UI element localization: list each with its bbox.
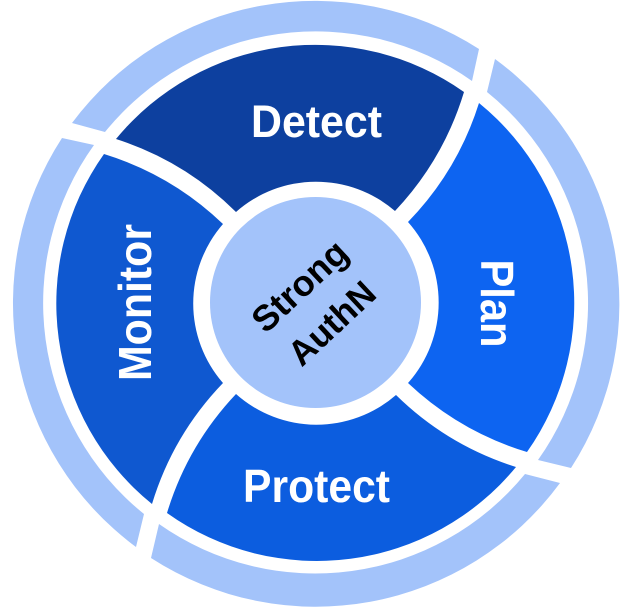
- label: Plan: Plan: [471, 260, 523, 348]
- hub label line: Strong: Strong: [243, 231, 356, 340]
- outer ring: right arc: [487, 59, 619, 468]
- segment: Monitor: [56, 154, 223, 504]
- outer ring: bottom arc: [151, 474, 560, 607]
- hub label line: AuthN: AuthN: [280, 274, 384, 374]
- segment: Detect: [116, 45, 464, 212]
- outer ring: top arc: [72, 1, 479, 132]
- segment: Plan: [408, 103, 574, 452]
- outer ring: left arc: [13, 138, 144, 547]
- label: Protect: Protect: [243, 460, 390, 512]
- label: Detect: Detect: [251, 96, 382, 147]
- label: Monitor: Monitor: [109, 224, 161, 381]
- center hub: Strong AuthN: [210, 197, 421, 408]
- segment: Protect: [167, 394, 516, 561]
